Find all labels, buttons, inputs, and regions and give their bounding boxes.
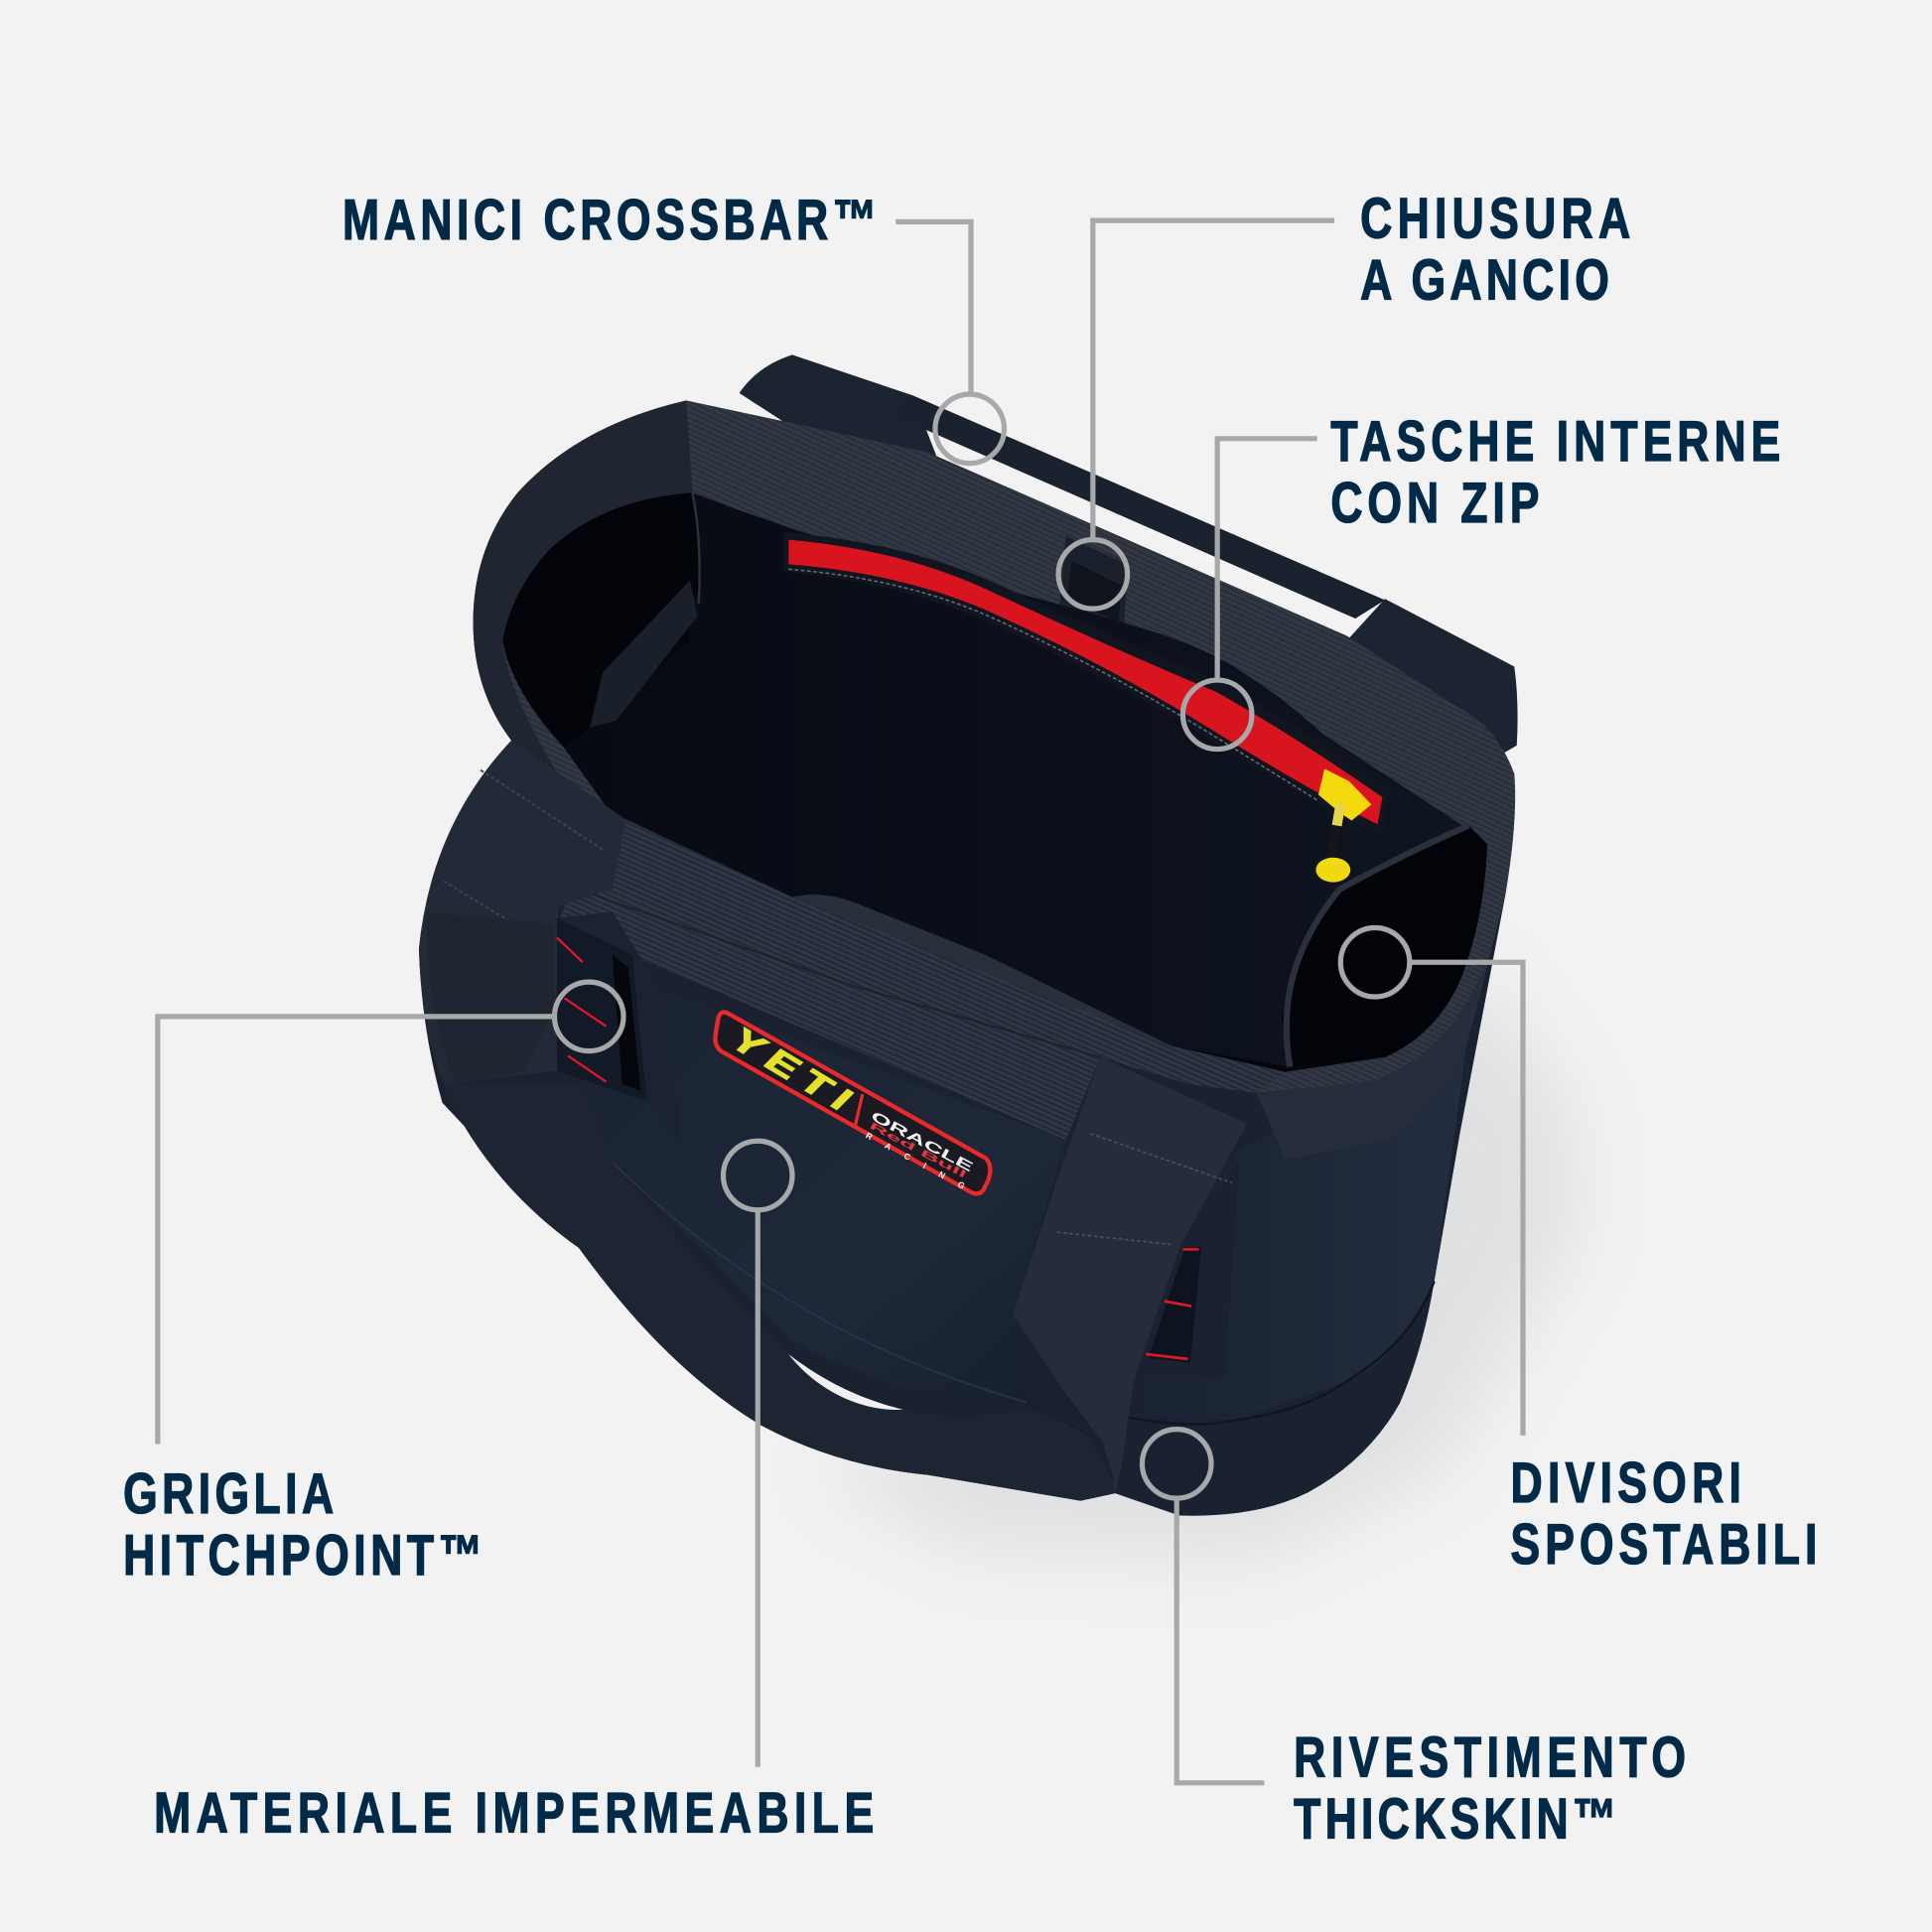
marker: divisori bbox=[1340, 928, 1410, 997]
label: rivestimento thickskin bbox=[1294, 1725, 1686, 1851]
callout: manici crossbar bbox=[343, 188, 1004, 464]
label: chiusura a gancio: A GANCIO bbox=[1360, 248, 1609, 312]
callout: tasche interne bbox=[1182, 410, 1780, 750]
label: chiusura a gancio: CHIUSURA bbox=[1360, 187, 1630, 250]
marker: tasche interne bbox=[1182, 680, 1252, 750]
callout: chiusura a gancio bbox=[1058, 187, 1630, 609]
back wall bbox=[564, 492, 1470, 1067]
callout: griglia hitchpoint bbox=[123, 982, 623, 1587]
side panel bbox=[1126, 1047, 1466, 1421]
logo text partner: ORACLE bbox=[869, 1108, 976, 1174]
interior bbox=[502, 492, 1487, 1072]
left handle tab bbox=[419, 741, 625, 1084]
back handle bbox=[740, 354, 1518, 763]
leader: manici crossbar bbox=[896, 221, 971, 394]
callout: materiale impermeabile bbox=[154, 1141, 874, 1845]
label: manici crossbar: MANICI CROSSBAR™ bbox=[343, 188, 877, 251]
label: divisori spostabili: DIVISORI bbox=[1511, 1451, 1741, 1514]
bag soft shadow bbox=[813, 961, 1578, 1559]
marker: manici crossbar bbox=[935, 394, 1004, 464]
leader: rivestimento bbox=[1176, 1498, 1264, 1783]
label: tasche interne con zip: CON ZIP bbox=[1330, 472, 1539, 534]
marker: materiale bbox=[724, 1141, 792, 1210]
right handle tab bbox=[1013, 1057, 1247, 1493]
label: rivestimento thickskin: THICKSKIN™ bbox=[1294, 1787, 1616, 1851]
label: divisori spostabili bbox=[1511, 1451, 1817, 1576]
callout: rivestimento thickskin bbox=[1142, 1430, 1686, 1851]
leader: materiale bbox=[756, 1210, 759, 1767]
callout: divisori spostabili bbox=[1340, 928, 1817, 1576]
leader: tasche interne bbox=[1217, 439, 1317, 680]
label: griglia hitchpoint: GRIGLIA bbox=[123, 1462, 334, 1525]
marker: chiusura a gancio bbox=[1058, 540, 1128, 609]
leader: chiusura a gancio bbox=[1093, 220, 1334, 540]
bag body silhouette bbox=[419, 741, 1514, 1516]
label: chiusura a gancio bbox=[1360, 187, 1630, 312]
logo patch bbox=[715, 1013, 990, 1193]
zip pocket bbox=[783, 532, 1390, 838]
left hitchpoint grid bbox=[557, 911, 681, 1142]
zipper pull bbox=[1315, 768, 1371, 883]
marker: griglia bbox=[554, 982, 623, 1051]
interior bottom sliver bbox=[792, 895, 1172, 1046]
front panel bbox=[579, 986, 1097, 1442]
right hitchpoint grid bbox=[1141, 1160, 1240, 1379]
logo text YETI: YETI bbox=[722, 1022, 861, 1117]
marker: rivestimento bbox=[1142, 1430, 1211, 1498]
label: tasche interne con zip: TASCHE INTERNE bbox=[1330, 410, 1780, 473]
left divider bbox=[502, 492, 700, 748]
label: griglia hitchpoint bbox=[123, 1462, 483, 1587]
logo text partner bbox=[864, 1108, 976, 1191]
label: materiale impermeabile: MATERIALE IMPERMEABILE bbox=[154, 1781, 874, 1845]
label: griglia hitchpoint: HITCHPOINT™ bbox=[123, 1524, 483, 1587]
lower left handle loop bbox=[443, 1084, 1128, 1501]
label: divisori spostabili: SPOSTABILI bbox=[1511, 1513, 1817, 1576]
front rim and crossbar strap bbox=[558, 819, 1285, 1140]
leader: griglia bbox=[158, 1017, 554, 1445]
right divider bbox=[1287, 826, 1487, 1067]
label: tasche interne con zip bbox=[1330, 410, 1780, 534]
logo text partner: RACING bbox=[864, 1130, 967, 1191]
rim bbox=[474, 400, 1515, 1160]
logo text partner: Red Bull bbox=[868, 1121, 969, 1181]
white gap under handle bbox=[788, 1354, 903, 1410]
leader: divisori bbox=[1411, 962, 1523, 1436]
illustration: tote bag bbox=[419, 354, 1518, 1516]
hook closure tab bbox=[1059, 536, 1128, 634]
label: rivestimento thickskin: RIVESTIMENTO bbox=[1294, 1725, 1686, 1789]
